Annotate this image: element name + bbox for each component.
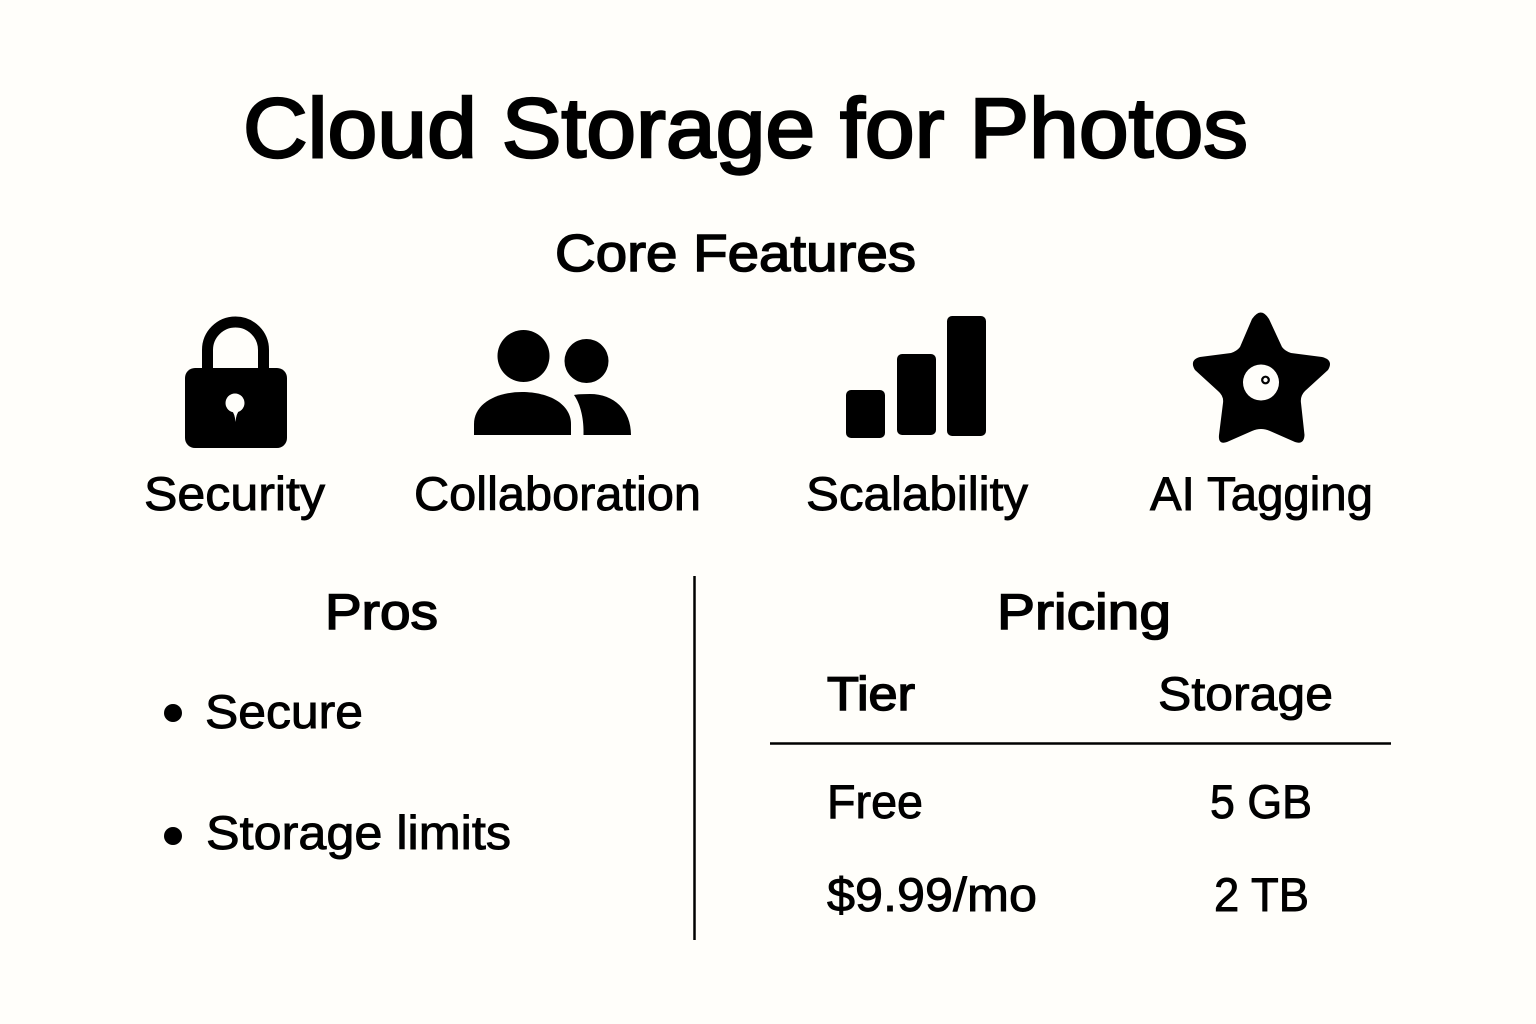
table cell: paid tier: $9.99/mo xyxy=(827,868,1037,921)
label: collaboration: Collaboration xyxy=(414,467,701,520)
icon: bar chart xyxy=(846,316,986,438)
panel: pricing xyxy=(770,584,1391,921)
table cell: free tier: Free xyxy=(827,775,923,828)
feature: security xyxy=(144,322,326,520)
title: Cloud Storage for Photos xyxy=(243,81,1248,175)
list item: secure: Secure xyxy=(205,685,363,738)
list item: storage limits: Storage limits xyxy=(206,806,511,859)
label: scalability: Scalability xyxy=(806,467,1029,520)
heading: pricing: Pricing xyxy=(997,584,1171,640)
heading: pros: Pros xyxy=(325,584,438,640)
icon: star with eye xyxy=(1193,312,1330,443)
feature: collaboration xyxy=(414,330,701,520)
feature: scalability xyxy=(806,316,1029,520)
feature: AI tagging xyxy=(1150,312,1373,520)
table cell: 5 GB: 5 GB xyxy=(1210,775,1312,828)
icon: padlock xyxy=(185,322,287,448)
table cell: 2 TB: 2 TB xyxy=(1214,868,1309,921)
icon: two people xyxy=(474,330,631,435)
panel: pros xyxy=(164,584,511,859)
label: security: Security xyxy=(144,467,326,520)
heading: core features: Core Features xyxy=(555,225,916,283)
table header: storage: Storage xyxy=(1158,667,1333,720)
label: AI tagging: AI Tagging xyxy=(1150,467,1373,520)
table header: tier: Tier xyxy=(827,667,915,720)
